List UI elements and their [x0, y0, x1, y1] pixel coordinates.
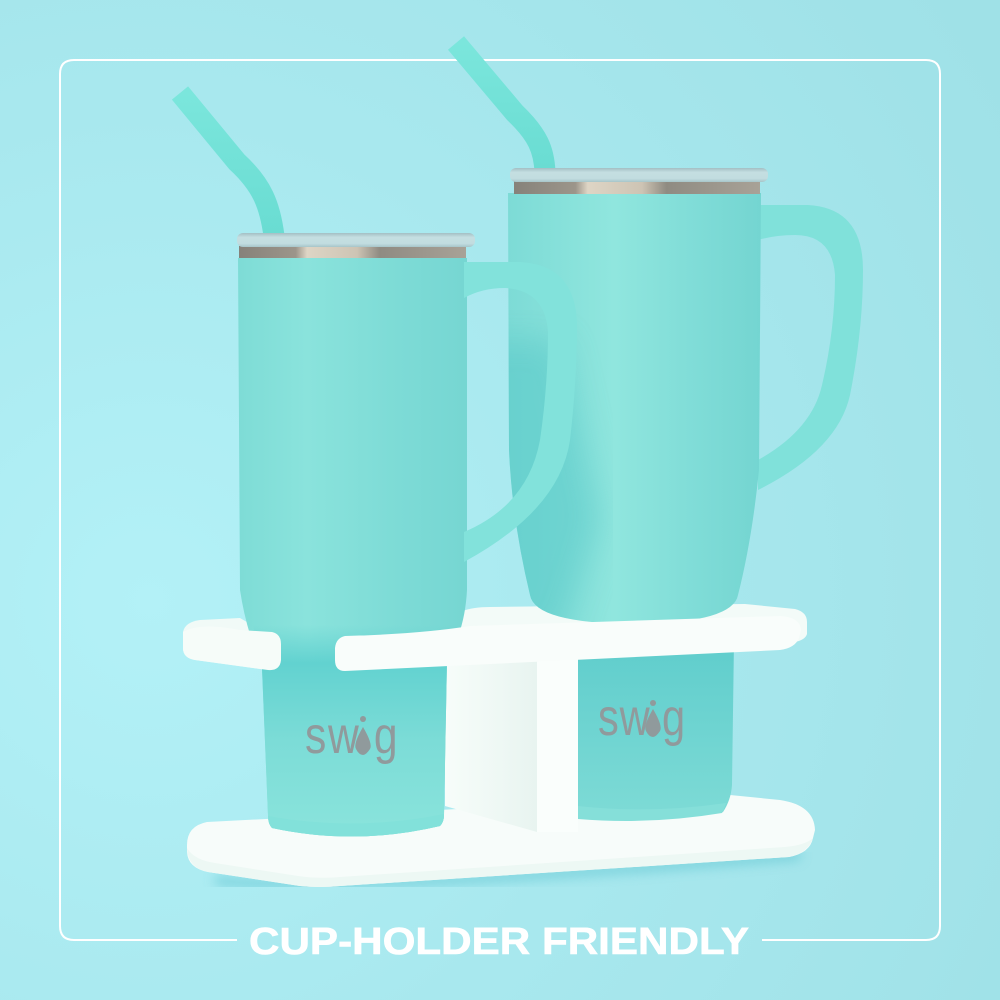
right mug	[456, 43, 863, 821]
stand post	[445, 655, 578, 832]
lid and steel rim: right mug	[510, 168, 768, 194]
top plate front bar	[335, 616, 801, 671]
lower shading: left mug	[253, 625, 458, 837]
logo: left mug: swig	[305, 707, 398, 765]
heading: CUP-HOLDER FRIENDLY	[249, 921, 749, 963]
body: left mug	[238, 258, 467, 837]
left mug	[180, 93, 577, 837]
body: right mug	[508, 193, 761, 622]
handle: left mug	[464, 262, 577, 562]
stand base	[187, 795, 815, 887]
lower body: right mug	[578, 640, 734, 821]
top plate rear surface	[445, 604, 807, 660]
bottom band: left mug	[268, 814, 444, 837]
lid and steel rim: left mug	[237, 233, 475, 258]
left arm of top plate	[183, 618, 281, 670]
front of left arm	[183, 626, 281, 670]
straw: left	[180, 93, 274, 236]
straw: right	[456, 43, 545, 172]
handle: right mug	[758, 205, 863, 490]
frame	[60, 60, 940, 940]
logo: right mug: swig	[598, 688, 685, 746]
